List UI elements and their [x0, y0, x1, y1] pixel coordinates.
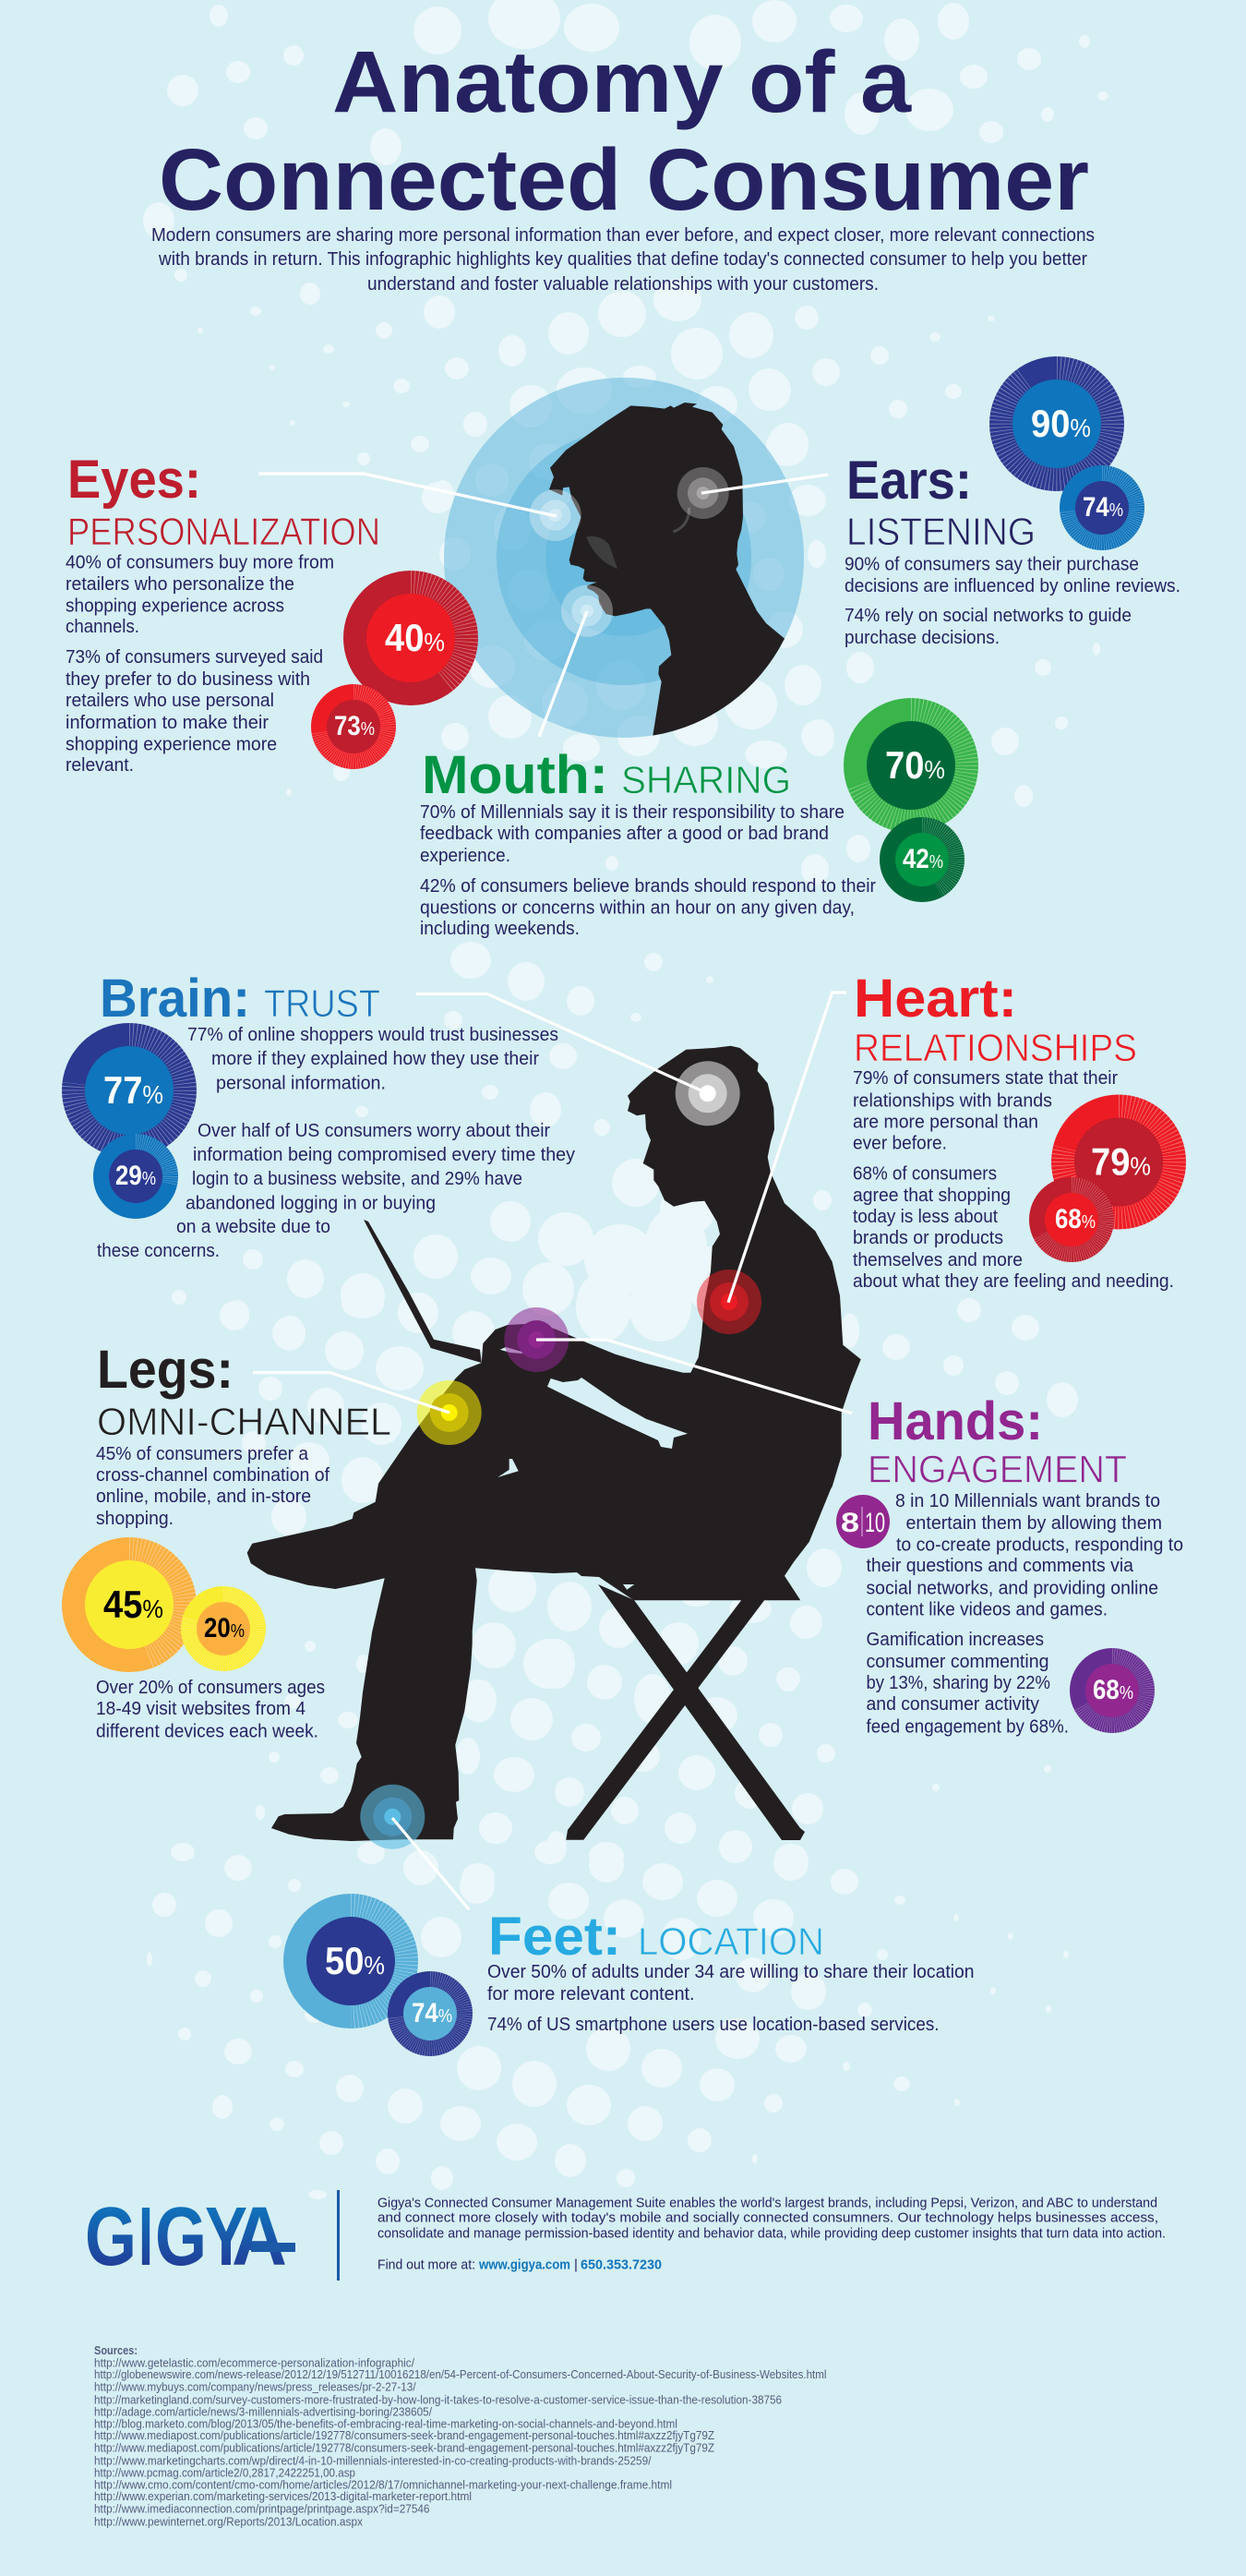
text: feet body: Over 50% of adults under 34 are willing to share their location: [487, 1962, 975, 1982]
text: brain body: Over half of US consumers worry about their: [198, 1121, 550, 1141]
subheading: relationships: RELATIONSHIPS: [854, 1026, 1137, 1069]
panel: hands: [836, 1391, 1183, 1738]
heading: heart: Heart:: [854, 969, 1017, 1029]
logo: gigya: Y: [205, 2191, 247, 2283]
title: Anatomy of a: [332, 33, 912, 131]
donut: 73%: [311, 684, 396, 769]
donut: 40%: [343, 571, 478, 705]
text: mouth body: 42% of consumers believe brands should respond to their: [420, 876, 876, 897]
heading: feet: Feet:: [488, 1907, 621, 1967]
line: heart pointer: [728, 993, 846, 1303]
donut: 45%: 45%: [103, 1583, 163, 1626]
text: company blurb: and connect more closely with today's mobile and socially connected consumners. Our technology helps businesses access,: [377, 2210, 1158, 2225]
line: eye pointer: [258, 474, 557, 516]
panel: legs: [62, 1340, 391, 1741]
text: hands body: and consumer activity: [866, 1694, 1039, 1715]
subheading: location: LOCATION: [638, 1920, 824, 1963]
text: brain body: personal information.: [216, 1073, 386, 1093]
panel: heart: [853, 969, 1186, 1292]
target: eye: [530, 489, 581, 541]
figure: [247, 1046, 861, 1841]
text: feet body: for more relevant content.: [487, 1984, 694, 2004]
panel: ears: [845, 356, 1180, 648]
target: legs: [417, 1380, 482, 1445]
intro text: understand and foster valuable relationships with your customers.: [367, 274, 879, 295]
panel: mouth: [420, 698, 978, 939]
donut: 70%: [844, 698, 978, 833]
text: brain body: these concerns.: [97, 1241, 220, 1261]
intro text: with brands in return. This infographic highlights key qualities that define today's connected consumer to help you better: [158, 249, 1087, 270]
text: hands body: their questions and comments via: [866, 1556, 1134, 1576]
text: brain body: more if they explained how they use their: [211, 1049, 539, 1069]
text: ears body: 74% rely on social networks to guide: [845, 606, 1132, 626]
chair: [566, 1584, 805, 1840]
text: hands body: social networks, and providing online: [866, 1579, 1158, 1599]
subheading: omni-channel: OMNI-CHANNEL: [97, 1400, 391, 1443]
text: legs body: cross-channel combination of: [96, 1465, 329, 1486]
logo: gigya: G: [85, 2191, 137, 2283]
donut: 42%: [880, 817, 964, 902]
text: mouth body: experience.: [420, 846, 510, 866]
text: feet body: 74% of US smartphone users use location-based services.: [487, 2015, 940, 2035]
logo: gigya: [85, 2191, 295, 2283]
text: hands body: consumer commenting: [866, 1652, 1048, 1672]
heading: ears: Ears:: [846, 451, 972, 511]
line: ear pointer: [701, 475, 828, 493]
donut: 73%: 73%: [334, 711, 375, 741]
text: heart body: 68% of consumers: [853, 1163, 997, 1184]
line: brain pointer: [416, 993, 707, 1093]
heading: mouth: Mouth:: [422, 745, 608, 805]
text: brain body: abandoned logging in or buying: [186, 1193, 436, 1213]
text: sources: http://marketingland.com/survey-customers-more-frustrated-by-how-long-it-takes-to-resolve-a-customer-service-issue-than-the-resolution-38756: [94, 2393, 782, 2406]
text: hands body: 8 in 10 Millennials want brands to: [895, 1491, 1160, 1511]
text: eyes body: retailers who use personal: [66, 691, 274, 711]
text: eyes body: 73% of consumers surveyed said: [66, 647, 323, 668]
text: legs body: [96, 1444, 329, 1741]
divider: [337, 2190, 340, 2281]
text: company blurb: 650.353.7230: [581, 2257, 662, 2273]
donut: 68%: 68%: [1093, 1675, 1133, 1705]
heading: hands: Hands:: [868, 1391, 1043, 1451]
line: legs pointer: [253, 1373, 449, 1413]
text: brain body: login to a business website, and 29% have: [192, 1169, 522, 1189]
text: sources: http://www.getelastic.com/ecommerce-personalization-infographic/: [94, 2356, 414, 2369]
text: sources: http://www.mediapost.com/publications/article/192778/consumers-seek-brand-engagement-personal-touches.html#axzz2fjyTg79Z: [94, 2428, 714, 2442]
donut: 74%: [388, 1971, 473, 2056]
seated person silhouette: [247, 1046, 861, 1841]
text: heart body: about what they are feeling and needing.: [853, 1271, 1174, 1292]
text: eyes body: 40% of consumers buy more from: [66, 552, 334, 572]
text: ears body: decisions are influenced by online reviews.: [845, 576, 1180, 596]
target: brain: [676, 1061, 740, 1125]
text: sources: http://globenewswire.com/news-release/2012/12/19/512711/10016218/en/54-Percent-of-Consumers-Concerned-About-Security-of-Business-Websites.html: [94, 2367, 827, 2381]
subheading: engagement: ENGAGEMENT: [868, 1448, 1127, 1490]
text: company blurb: [377, 2196, 1166, 2273]
line: mouth pointer: [539, 611, 587, 737]
text: mouth body: [420, 802, 876, 939]
title: [159, 33, 1089, 229]
text: sources: http://adage.com/article/news/3-millennials-advertising-boring/238605/: [94, 2404, 432, 2419]
heading: brain: Brain:: [100, 969, 250, 1029]
icon: 8 in 10 badge: 8: [841, 1508, 859, 1538]
text: legs body: different devices each week.: [96, 1721, 318, 1741]
text: sources: http://www.marketingcharts.com/wp/direct/4-in-10-millennials-interested-in-co-creating-products-with-brands-25259/: [94, 2454, 652, 2467]
head illustration: [444, 378, 804, 738]
target: mouth: [561, 585, 613, 637]
donut: 90%: 90%: [1031, 402, 1091, 445]
text: eyes body: shopping experience across: [66, 596, 284, 617]
subheading: trust: TRUST: [264, 981, 380, 1025]
text: company blurb: |: [574, 2257, 578, 2273]
donut: 68%: 68%: [1055, 1204, 1096, 1234]
text: mouth body: including weekends.: [420, 919, 580, 939]
panel: feet: [283, 1894, 975, 2056]
text: company blurb: www.gigya.com: [478, 2257, 570, 2273]
text: brain body: information being compromised every time they: [193, 1145, 575, 1165]
text: heart body: [853, 1068, 1174, 1292]
donut: 29%: [93, 1134, 178, 1219]
text: hands body: [866, 1491, 1183, 1738]
text: heart body: agree that shopping: [853, 1186, 1011, 1206]
donut: 70%: 70%: [885, 743, 945, 787]
line: feet pointer: [392, 1818, 469, 1909]
donut: 45%: [62, 1537, 197, 1672]
text: sources: http://www.mybuys.com/company/news/press_releases/pr-2-27-13/: [94, 2380, 416, 2393]
title: Connected Consumer: [159, 131, 1089, 229]
text: eyes body: they prefer to do business with: [66, 669, 310, 690]
text: sources: http://www.cmo.com/content/cmo-com/home/articles/2012/8/17/omnichannel-marketing-your-next-challenge.frame.html: [94, 2478, 672, 2491]
laptop: [364, 1220, 482, 1363]
icon: 8 in 10 badge: 10: [865, 1508, 885, 1538]
text: ears body: purchase decisions.: [845, 628, 1000, 648]
donut: 29%: 29%: [115, 1161, 156, 1191]
intro text: Modern consumers are sharing more personal information than ever before, and expect closer, more relevant connections: [151, 225, 1095, 246]
text: brain body: [97, 1025, 575, 1261]
text: hands body: Gamification increases: [866, 1630, 1044, 1650]
text: hands body: content like videos and games.: [866, 1599, 1108, 1619]
text: sources: http://www.imediaconnection.com/printpage/printpage.aspx?id=27546: [94, 2502, 430, 2515]
text: legs body: 18-49 visit websites from 4: [96, 1699, 306, 1719]
text: sources: http://blog.marketo.com/blog/2013/05/the-benefits-of-embracing-real-time-marketing-on-social-channels-and-beyond.html: [94, 2417, 677, 2430]
text: sources: http://www.mediapost.com/publications/article/192778/consumers-seek-brand-engagement-personal-touches.html#axzz2fjyTg79Z: [94, 2441, 714, 2454]
text: heart body: relationships with brands: [853, 1091, 1052, 1112]
donut: 68%: [1029, 1177, 1114, 1262]
text: eyes body: channels.: [66, 617, 139, 637]
text: sources: [94, 2343, 827, 2528]
text: eyes body: [66, 552, 334, 776]
text: hands body: entertain them by allowing them: [906, 1513, 1162, 1534]
text: eyes body: relevant.: [66, 755, 134, 776]
text: legs body: shopping.: [96, 1509, 174, 1529]
donut: 42%: 42%: [903, 844, 943, 874]
text: heart body: today is less about: [853, 1207, 998, 1227]
target: ear: [677, 467, 729, 519]
donut: 79%: 79%: [1091, 1139, 1151, 1184]
donut: 74%: [1060, 465, 1144, 550]
text: mouth body: feedback with companies after a good or bad brand: [420, 824, 829, 844]
subheading: listening: LISTENING: [846, 510, 1036, 553]
donut: 20%: [181, 1586, 266, 1671]
donut: 68%: [1070, 1648, 1155, 1733]
text: heart body: ever before.: [853, 1134, 947, 1154]
target: heart: [697, 1270, 761, 1334]
text: company blurb: consolidate and manage permission-based identity and behavior data, while providing deep customer insights that turn data into action.: [377, 2225, 1166, 2242]
text: sources: http://www.experian.com/marketing-services/2013-digital-marketer-report.html: [94, 2489, 472, 2503]
text: sources: http://www.pewinternet.org/Reports/2013/Location.aspx: [94, 2515, 363, 2528]
subheading: sharing: SHARING: [621, 758, 791, 801]
text: sources: Sources:: [94, 2343, 138, 2357]
donut: 20%: 20%: [204, 1613, 245, 1643]
heading: legs: Legs:: [97, 1340, 234, 1400]
text: legs body: online, mobile, and in-store: [96, 1487, 311, 1507]
text: brain body: on a website due to: [176, 1217, 330, 1237]
text: legs body: 45% of consumers prefer a: [96, 1444, 309, 1464]
text: heart body: brands or products: [853, 1228, 1003, 1248]
text: legs body: Over 20% of consumers ages: [96, 1678, 325, 1698]
line: hands pointer: [536, 1340, 852, 1414]
heading: eyes: Eyes:: [67, 450, 201, 510]
target: feet: [360, 1785, 425, 1849]
donut: 90%: [989, 356, 1124, 491]
donut: 77%: 77%: [103, 1068, 163, 1112]
text: mouth body: questions or concerns within an hour on any given day,: [420, 897, 855, 918]
icon: 8 in 10 badge: [836, 1495, 890, 1548]
text: brain body: 77% of online shoppers would trust businesses: [187, 1025, 558, 1045]
donut: 50%: [283, 1894, 418, 2028]
text: mouth body: 70% of Millennials say it is their responsibility to share: [420, 802, 845, 823]
text: heart body: themselves and more: [853, 1250, 1023, 1270]
logo: gigya: G: [155, 2191, 207, 2283]
panel: eyes: [66, 450, 478, 776]
donut: 74%: 74%: [412, 1998, 452, 2028]
text: heart body: are more personal than: [853, 1112, 1038, 1132]
donut: 74%: 74%: [1083, 492, 1123, 523]
text: heart body: 79% of consumers state that their: [853, 1068, 1118, 1089]
text: eyes body: retailers who personalize the: [66, 574, 294, 595]
text: company blurb: Gigya's Connected Consumer Management Suite enables the world's largest brands, including Pepsi, Verizon, and ABC to understand: [377, 2196, 1157, 2210]
subheading: personalization: PERSONALIZATION: [67, 510, 380, 553]
logo: gigya: I: [138, 2191, 153, 2283]
text: feet body: [487, 1962, 975, 2035]
donut: 50%: 50%: [325, 1939, 385, 1982]
donut: 77%: [62, 1023, 197, 1158]
text: hands body: to co-create products, responding to: [896, 1535, 1183, 1555]
logo: gigya: A: [232, 2191, 287, 2283]
text: eyes body: shopping experience more: [66, 735, 277, 755]
text: hands body: feed engagement by 68%.: [866, 1717, 1069, 1738]
text: sources: http://www.pcmag.com/article2/0,2817,2422251,00.asp: [94, 2465, 355, 2480]
text: company blurb: Find out more at:: [377, 2257, 475, 2273]
donut: 79%: [1051, 1095, 1186, 1230]
text: ears body: 90% of consumers say their purchase: [845, 554, 1139, 574]
donut: 40%: 40%: [385, 616, 445, 659]
text: eyes body: information to make their: [66, 713, 269, 733]
intro text: [151, 225, 1095, 295]
panel: brain: [62, 969, 575, 1261]
text: ears body: [845, 554, 1180, 648]
target: hands: [504, 1307, 569, 1372]
text: hands body: by 13%, sharing by 22%: [866, 1673, 1050, 1693]
